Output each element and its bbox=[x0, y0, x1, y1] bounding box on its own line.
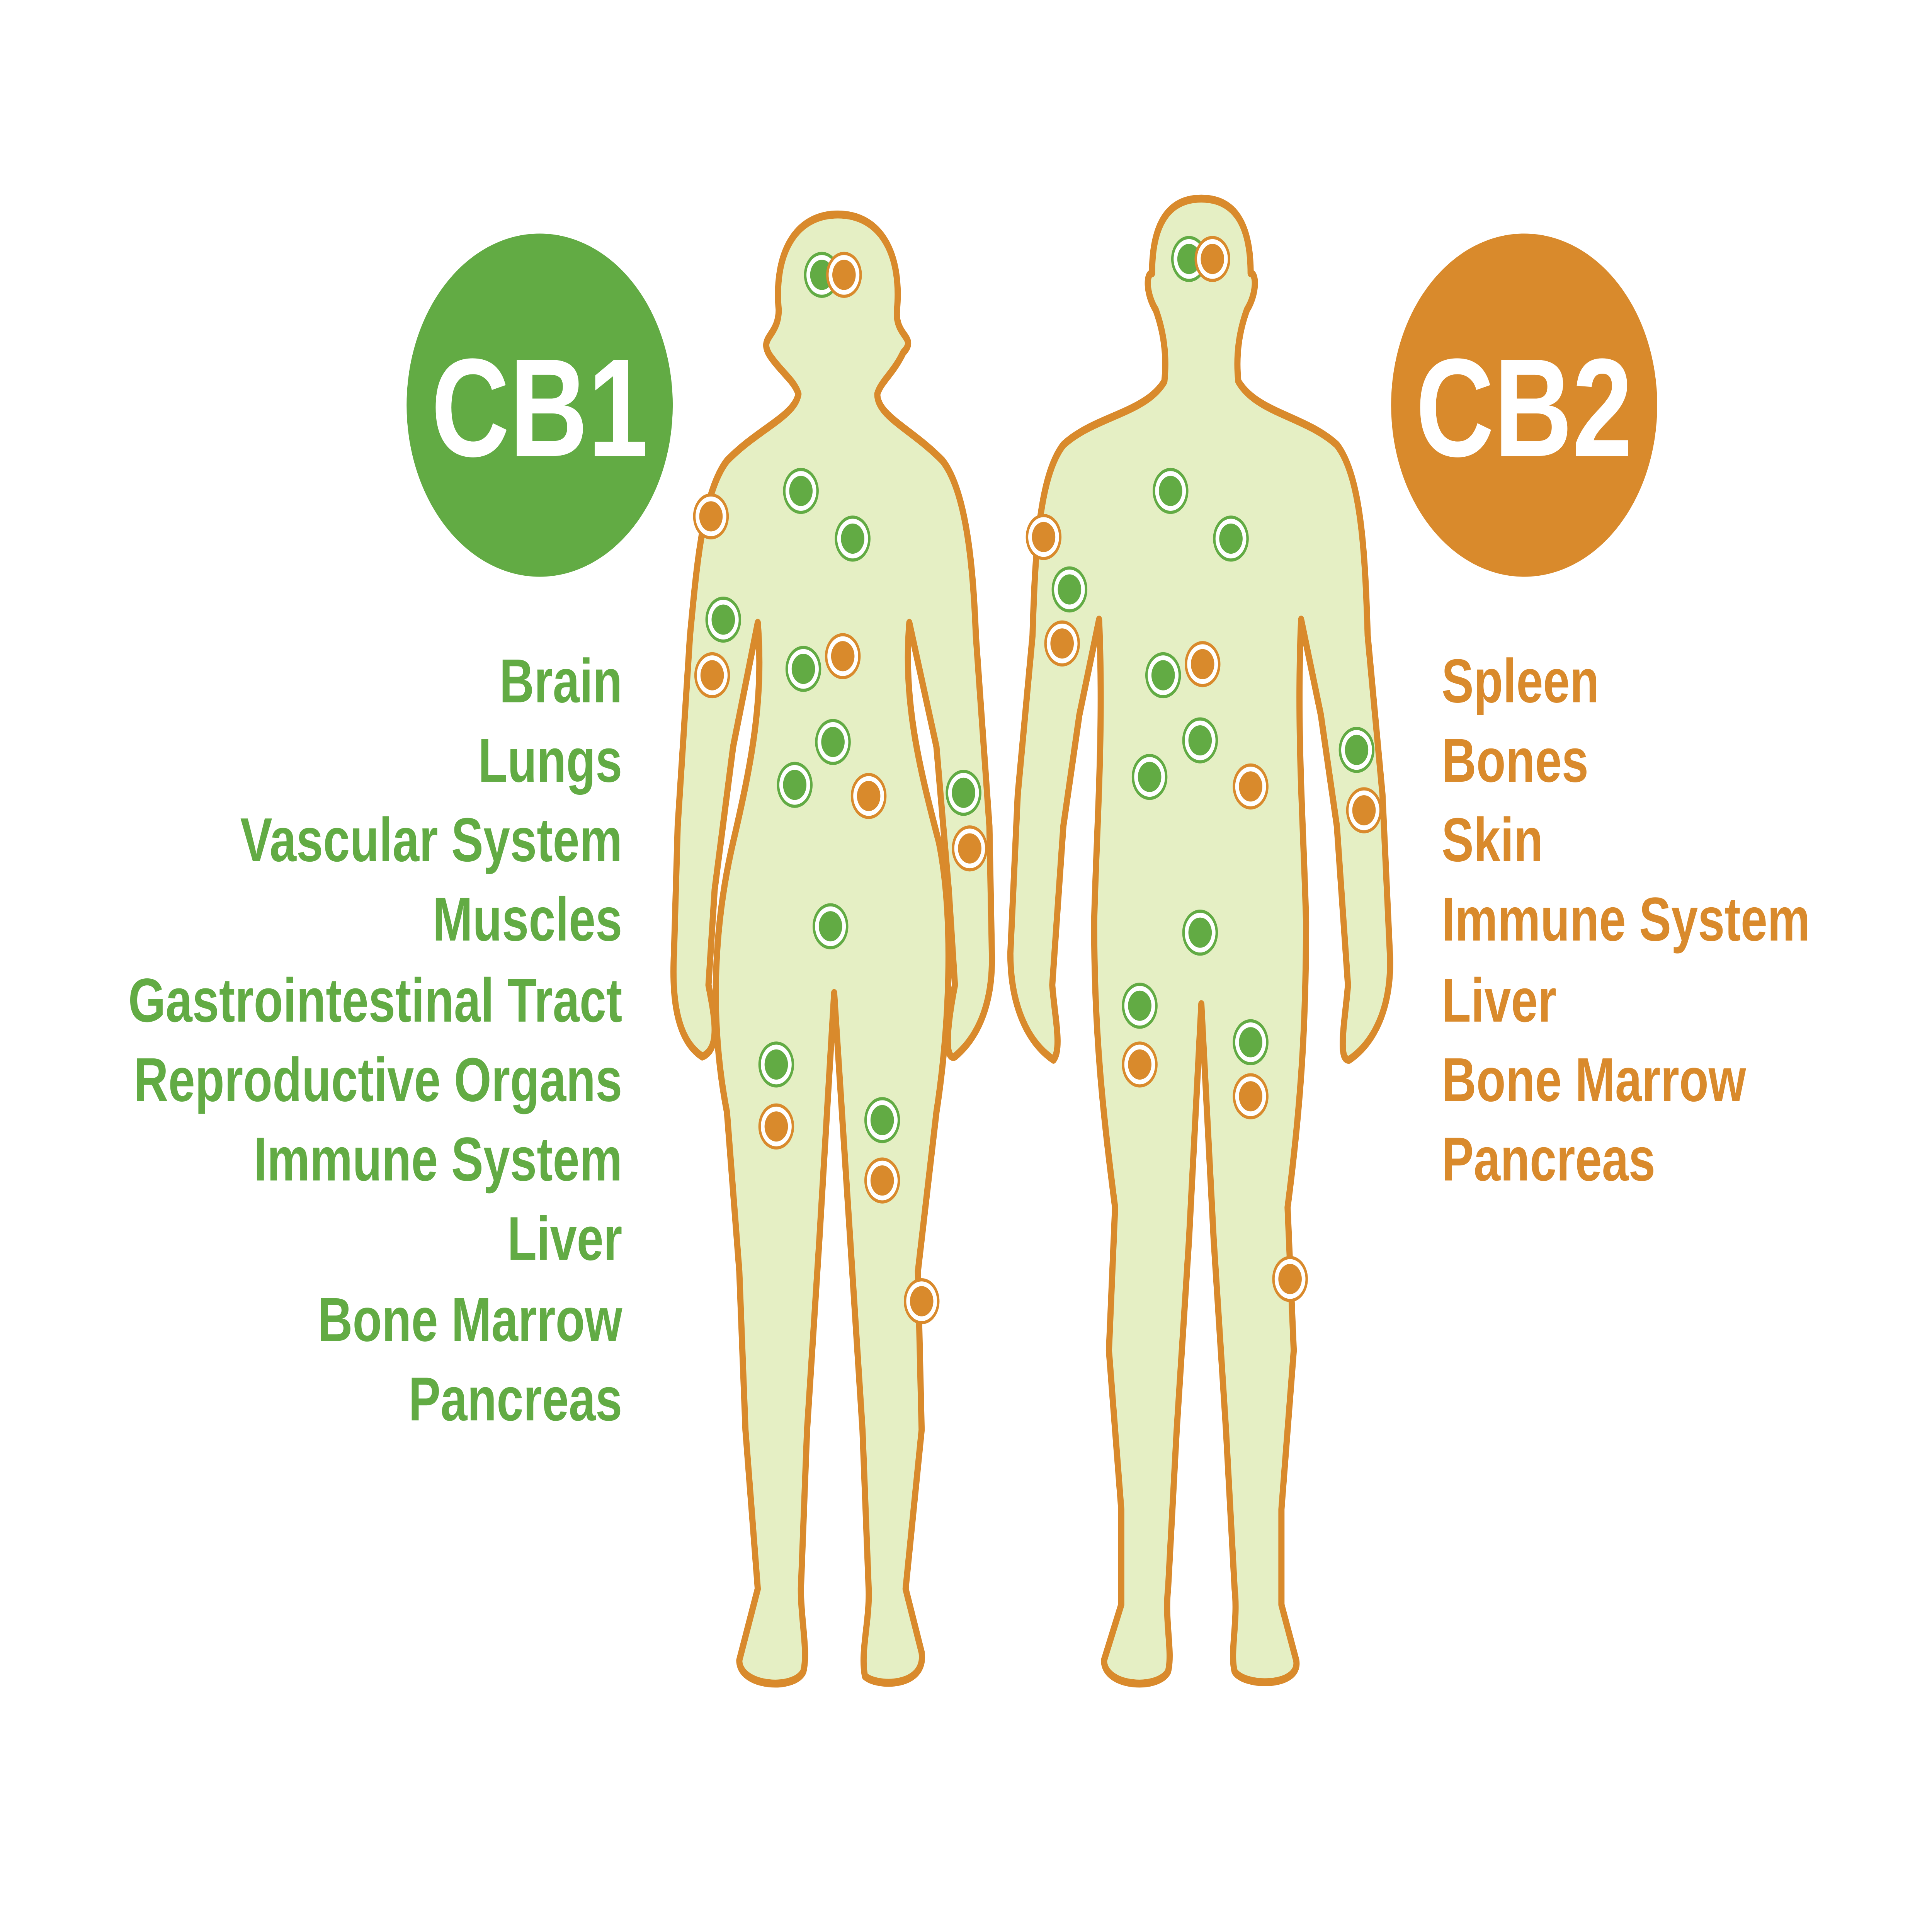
list: CB1 locations: Lungs bbox=[478, 726, 622, 795]
markers: male CB2 receptor dots bbox=[1027, 238, 1381, 1301]
badge: CB1: CB1 bbox=[431, 330, 648, 486]
list: CB2 locations bbox=[1442, 646, 1810, 1194]
list: CB2 locations: Pancreas bbox=[1442, 1125, 1655, 1194]
list: CB1 locations: Pancreas bbox=[408, 1365, 622, 1434]
list: CB1 locations: Liver bbox=[507, 1204, 622, 1273]
list: CB2 locations: Skin bbox=[1442, 805, 1543, 874]
markers: female CB2 receptor dots bbox=[694, 253, 986, 1323]
markers: female CB1 receptor dots bbox=[707, 253, 980, 1141]
list: CB1 locations: Gastrointestinal Tract bbox=[128, 966, 622, 1035]
list: CB1 locations: Muscles bbox=[433, 885, 622, 954]
list: CB1 locations: Brain bbox=[499, 646, 622, 716]
markers: male CB1 receptor dots bbox=[1053, 238, 1373, 1064]
figure: female body bbox=[673, 214, 992, 1684]
list: CB1 locations: Reproductive Organs bbox=[134, 1045, 622, 1114]
list: CB1 locations bbox=[128, 646, 622, 1434]
list: CB2 locations: Liver bbox=[1442, 966, 1556, 1035]
list: CB1 locations: Immune System bbox=[254, 1125, 622, 1194]
list: CB1 locations: Bone Marrow bbox=[318, 1285, 622, 1354]
list: CB2 locations: Bone Marrow bbox=[1442, 1045, 1746, 1114]
list: CB2 locations: Spleen bbox=[1442, 646, 1599, 716]
list: CB2 locations: Immune System bbox=[1442, 885, 1810, 954]
figure: male body bbox=[1010, 199, 1390, 1684]
badge: CB2: CB2 bbox=[1416, 330, 1633, 486]
list: CB2 locations: Bones bbox=[1442, 726, 1588, 795]
list: CB1 locations: Vascular System bbox=[240, 805, 622, 874]
badge: CB2 bbox=[1391, 233, 1657, 577]
badge: CB1 bbox=[406, 233, 673, 577]
